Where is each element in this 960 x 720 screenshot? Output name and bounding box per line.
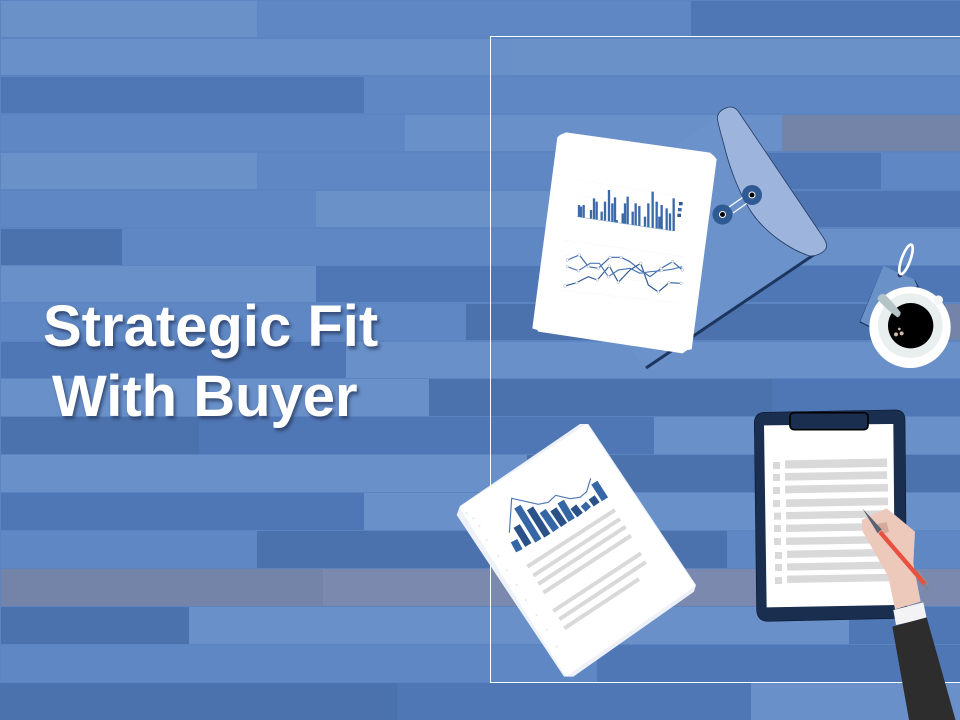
clipboard board	[754, 410, 907, 621]
bar chart	[577, 180, 683, 231]
tag	[859, 243, 919, 339]
icon: envelope	[560, 107, 827, 368]
spoon	[877, 294, 901, 317]
report paper with bar graph and text lines	[457, 424, 696, 677]
clipboard clip	[790, 413, 868, 430]
envelope body	[560, 109, 826, 368]
envelope button left	[712, 204, 732, 224]
under sheet	[457, 424, 696, 677]
binding holes	[465, 512, 558, 648]
bars	[514, 483, 605, 551]
jacket sleeve	[892, 617, 956, 720]
envelope bottom edge shadow	[646, 246, 826, 368]
report paper with charts	[532, 132, 717, 353]
trend line	[509, 478, 591, 533]
title line 2: With Buyer	[52, 364, 358, 429]
hand	[862, 508, 921, 609]
cup rim	[878, 293, 943, 358]
line chart	[559, 240, 684, 303]
coffee bubbles	[894, 328, 904, 336]
pencil	[862, 508, 928, 591]
checklist	[773, 459, 889, 584]
envelope string	[729, 193, 753, 213]
clipboard paper	[764, 424, 895, 607]
top sheet	[459, 424, 695, 677]
clipboard and writing hand	[754, 410, 956, 720]
envelope flap	[717, 107, 827, 256]
white frame	[490, 36, 960, 682]
coffee	[888, 303, 933, 348]
envelope button right	[742, 185, 762, 205]
shirt cuff	[893, 602, 927, 625]
title	[43, 294, 382, 433]
paper stack	[532, 132, 717, 353]
icon: coffee cup and tag	[859, 243, 951, 368]
title line 1: Strategic Fit	[43, 294, 378, 359]
thumb shadow	[877, 522, 889, 535]
text lines	[527, 510, 646, 628]
saucer	[869, 287, 951, 368]
